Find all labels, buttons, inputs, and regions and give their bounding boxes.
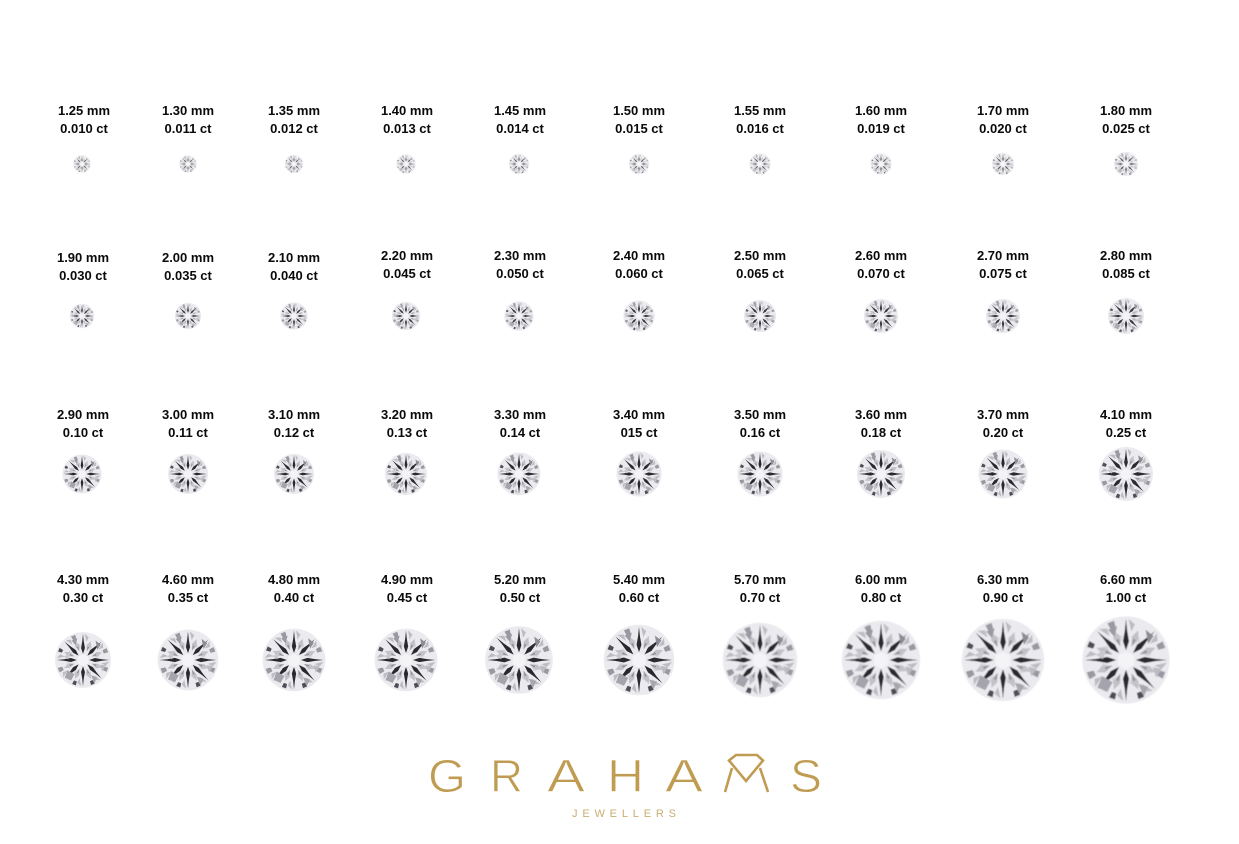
- wordmark letters: A: [547, 750, 585, 802]
- size 1.40 mm: 1.40 mm: [381, 103, 433, 118]
- size 3.40 mm: 015 ct: [621, 425, 658, 440]
- logo: Grahams Jewellers: [428, 750, 822, 820]
- size 1.80 mm: [1100, 103, 1152, 176]
- size 2.60 mm: [855, 248, 907, 333]
- size 3.20 mm: 3.20 mm: [381, 407, 433, 422]
- size 6.30 mm: 0.90 ct: [983, 590, 1024, 605]
- size 1.60 mm: 1.60 mm: [855, 103, 907, 118]
- size 2.50 mm: 0.065 ct: [736, 266, 785, 281]
- size 1.45 mm: 1.45 mm: [494, 103, 546, 118]
- size 1.50 mm: 0.015 ct: [615, 121, 664, 136]
- size 3.30 mm: 0.14 ct: [500, 425, 541, 440]
- row 4: 4.30 to 6.60 mm: [55, 572, 1170, 704]
- size 4.60 mm: [158, 572, 218, 690]
- size 3.10 mm: [268, 407, 320, 494]
- size 4.90 mm: 4.90 mm: [381, 572, 433, 587]
- size 2.40 mm: 2.40 mm: [613, 248, 665, 263]
- size 2.10 mm: 0.040 ct: [270, 268, 319, 283]
- size 3.50 mm: 3.50 mm: [734, 407, 786, 422]
- size 3.70 mm: 0.20 ct: [983, 425, 1024, 440]
- size 2.00 mm: 0.035 ct: [164, 268, 213, 283]
- size 5.70 mm: 0.70 ct: [740, 590, 781, 605]
- size 1.90 mm: 1.90 mm: [57, 250, 109, 265]
- size 2.00 mm: 2.00 mm: [162, 250, 214, 265]
- size 1.35 mm: 0.012 ct: [270, 121, 319, 136]
- size 4.60 mm: 0.35 ct: [168, 590, 209, 605]
- size 2.10 mm: [268, 250, 320, 330]
- size 4.10 mm: 0.25 ct: [1106, 425, 1147, 440]
- size 6.60 mm: [1082, 572, 1170, 704]
- wordmark letters: S: [790, 750, 822, 802]
- size 4.60 mm: 4.60 mm: [162, 572, 214, 587]
- size 2.40 mm: [613, 248, 665, 332]
- size 5.70 mm: 5.70 mm: [734, 572, 786, 587]
- size 3.70 mm: [977, 407, 1029, 498]
- size 1.25 mm: 1.25 mm: [58, 103, 110, 118]
- row 3: 2.90 to 4.10 mm: [57, 407, 1153, 501]
- size 4.80 mm: 4.80 mm: [268, 572, 320, 587]
- size 3.00 mm: 3.00 mm: [162, 407, 214, 422]
- size 5.40 mm: [604, 572, 674, 695]
- size 2.90 mm: 0.10 ct: [63, 425, 104, 440]
- size 3.10 mm: 0.12 ct: [274, 425, 315, 440]
- size 1.60 mm: 0.019 ct: [857, 121, 906, 136]
- size 4.30 mm: 0.30 ct: [63, 590, 104, 605]
- size 1.25 mm: [58, 103, 110, 173]
- size 1.30 mm: 0.011 ct: [164, 121, 212, 136]
- size 4.10 mm: 4.10 mm: [1100, 407, 1152, 422]
- size 3.70 mm: 3.70 mm: [977, 407, 1029, 422]
- size 2.20 mm: 0.045 ct: [383, 266, 432, 281]
- wordmark letters: R: [490, 750, 523, 802]
- size 3.40 mm: [613, 407, 665, 497]
- size 3.60 mm: [855, 407, 907, 498]
- size 4.80 mm: [263, 572, 325, 691]
- size 6.60 mm: 1.00 ct: [1106, 590, 1147, 605]
- wordmark letters: A: [665, 750, 703, 802]
- size 4.90 mm: 0.45 ct: [387, 590, 428, 605]
- size 1.70 mm: 0.020 ct: [979, 121, 1028, 136]
- size 6.30 mm: 6.30 mm: [977, 572, 1029, 587]
- size 1.35 mm: 1.35 mm: [268, 103, 320, 118]
- size 1.40 mm: [381, 103, 433, 174]
- size 1.80 mm: 0.025 ct: [1102, 121, 1151, 136]
- size 3.60 mm: 0.18 ct: [861, 425, 902, 440]
- size 1.50 mm: [613, 103, 665, 174]
- size 2.80 mm: [1100, 248, 1152, 334]
- size 4.10 mm: [1099, 407, 1153, 501]
- size 2.70 mm: 0.075 ct: [979, 266, 1028, 281]
- size 2.30 mm: [494, 248, 546, 331]
- size 1.70 mm: 1.70 mm: [977, 103, 1029, 118]
- size 3.30 mm: 3.30 mm: [494, 407, 546, 422]
- size 2.70 mm: [977, 248, 1029, 333]
- size 3.10 mm: 3.10 mm: [268, 407, 320, 422]
- tagline: JEWELLERS: [572, 808, 676, 820]
- wordmark letters: H: [607, 750, 644, 802]
- size 5.70 mm: [723, 572, 797, 697]
- size 2.50 mm: [734, 248, 786, 332]
- wordmark letters: G: [428, 750, 466, 802]
- size 2.40 mm: 0.060 ct: [615, 266, 664, 281]
- size 1.80 mm: 1.80 mm: [1100, 103, 1152, 118]
- size 2.80 mm: 2.80 mm: [1100, 248, 1152, 263]
- size 1.55 mm: 1.55 mm: [734, 103, 786, 118]
- size 6.00 mm: [842, 572, 920, 699]
- size 4.80 mm: 0.40 ct: [274, 590, 315, 605]
- size 2.60 mm: 2.60 mm: [855, 248, 907, 263]
- size 3.60 mm: 3.60 mm: [855, 407, 907, 422]
- size 2.70 mm: 2.70 mm: [977, 248, 1029, 263]
- size 1.45 mm: [494, 103, 546, 174]
- size 3.20 mm: 0.13 ct: [387, 425, 428, 440]
- size 1.25 mm: 0.010 ct: [60, 121, 109, 136]
- size 1.35 mm: [268, 103, 320, 173]
- size 1.40 mm: 0.013 ct: [383, 121, 432, 136]
- size 2.50 mm: 2.50 mm: [734, 248, 786, 263]
- size 2.30 mm: 0.050 ct: [496, 266, 545, 281]
- size 6.30 mm: [962, 572, 1044, 701]
- size 2.20 mm: 2.20 mm: [381, 248, 433, 263]
- size 3.20 mm: [381, 407, 433, 495]
- size 1.60 mm: [855, 103, 907, 175]
- size 1.55 mm: 0.016 ct: [736, 121, 785, 136]
- size 2.10 mm: 2.10 mm: [268, 250, 320, 265]
- size 5.20 mm: 0.50 ct: [500, 590, 541, 605]
- size 2.90 mm: [57, 407, 109, 494]
- size 2.80 mm: 0.085 ct: [1102, 266, 1151, 281]
- size 1.50 mm: 1.50 mm: [613, 103, 665, 118]
- size 3.00 mm: [162, 407, 214, 494]
- size 4.30 mm: [55, 572, 111, 688]
- size 5.20 mm: [485, 572, 553, 694]
- size 1.90 mm: 0.030 ct: [59, 268, 108, 283]
- size 3.40 mm: 3.40 mm: [613, 407, 665, 422]
- row 2: 1.90 to 2.80 mm: [57, 248, 1152, 334]
- size 2.90 mm: 2.90 mm: [57, 407, 109, 422]
- size 1.45 mm: 0.014 ct: [496, 121, 545, 136]
- size 3.30 mm: [494, 407, 546, 496]
- size 5.20 mm: 5.20 mm: [494, 572, 546, 587]
- size 3.50 mm: [734, 407, 786, 497]
- size 2.60 mm: 0.070 ct: [857, 266, 906, 281]
- row 1: 1.25 to 1.80 mm: [58, 103, 1152, 176]
- size 1.55 mm: [734, 103, 786, 175]
- wordmark letters: [428, 750, 822, 802]
- size 5.40 mm: 5.40 mm: [613, 572, 665, 587]
- size 2.30 mm: 2.30 mm: [494, 248, 546, 263]
- size 3.50 mm: 0.16 ct: [740, 425, 781, 440]
- size 1.70 mm: [977, 103, 1029, 175]
- size 1.90 mm: [57, 250, 109, 328]
- size 3.00 mm: 0.11 ct: [168, 425, 209, 440]
- size 6.00 mm: 6.00 mm: [855, 572, 907, 587]
- size 4.90 mm: [375, 572, 437, 691]
- size 6.60 mm: 6.60 mm: [1100, 572, 1152, 587]
- size 4.30 mm: 4.30 mm: [57, 572, 109, 587]
- size 6.00 mm: 0.80 ct: [861, 590, 902, 605]
- size 1.30 mm: [162, 103, 214, 173]
- size 2.00 mm: [162, 250, 214, 329]
- icon: diamond M: [725, 755, 768, 792]
- size 2.20 mm: [381, 248, 433, 330]
- size 1.30 mm: 1.30 mm: [162, 103, 214, 118]
- size 5.40 mm: 0.60 ct: [619, 590, 660, 605]
